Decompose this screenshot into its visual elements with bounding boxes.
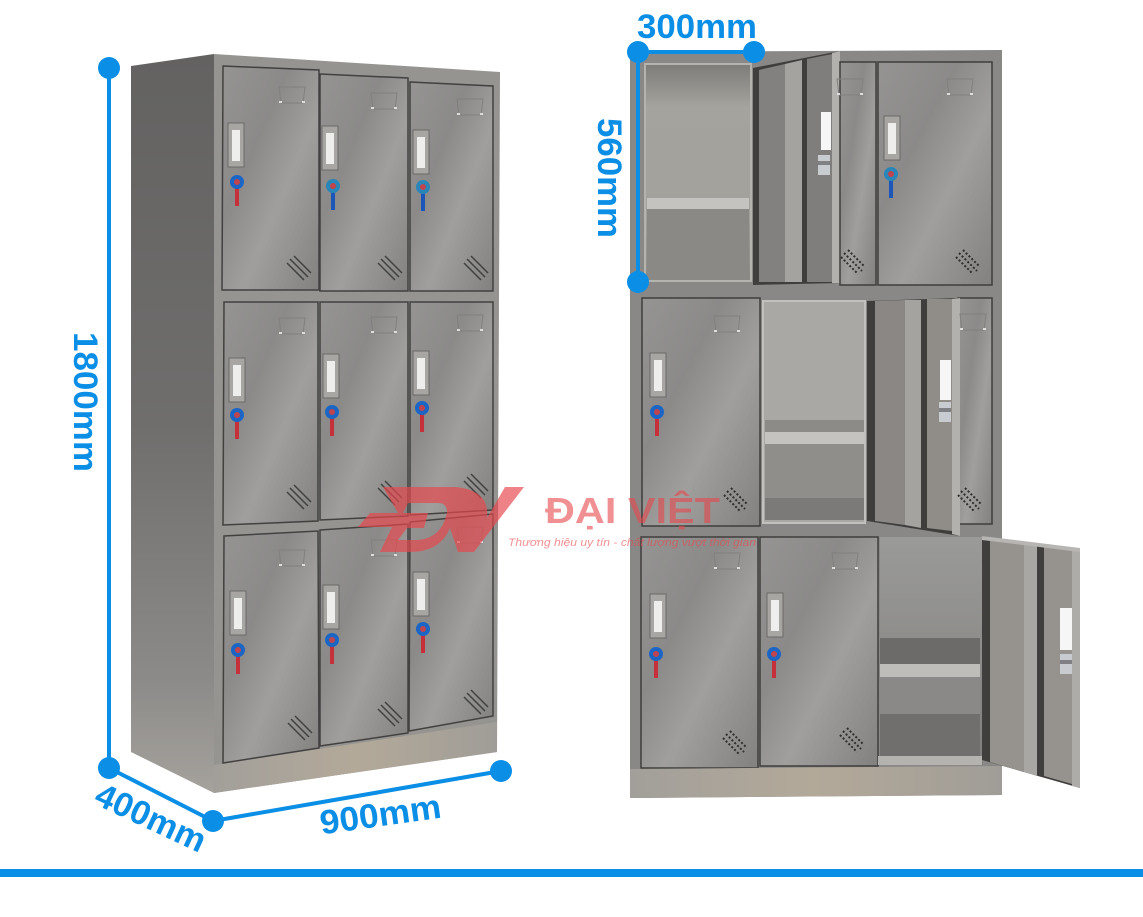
middle row doors xyxy=(223,302,493,525)
bottom row shelves xyxy=(878,638,982,765)
dimension: width 900mm xyxy=(213,760,512,842)
cabinet plinth xyxy=(630,766,1002,798)
bottom row open door xyxy=(982,536,1080,788)
locks and keys xyxy=(230,175,430,674)
dimension: width 900mm: 900mm xyxy=(317,788,444,842)
locks and keys xyxy=(649,167,898,678)
bottom row compartment open xyxy=(880,537,983,765)
watermark logo xyxy=(358,487,756,552)
cabinet front frame xyxy=(214,54,500,793)
brand name: ĐẠI VIỆT xyxy=(545,489,720,531)
dimension: height 1800mm xyxy=(66,57,120,779)
top row shelf xyxy=(647,198,749,209)
dimension: door height 560mm: 560mm xyxy=(590,118,628,238)
middle row compartment open xyxy=(763,301,865,523)
door latches xyxy=(714,79,986,569)
top row doors xyxy=(222,66,493,291)
door latches xyxy=(279,87,483,566)
dimension: depth 400mm: 400mm xyxy=(89,776,212,860)
cabinet plinth xyxy=(214,722,497,793)
top row compartment open xyxy=(645,64,751,281)
bottom row closed doors xyxy=(641,537,878,768)
middle row far door xyxy=(958,298,992,524)
dimension: height 1800mm: 1800mm xyxy=(66,332,104,472)
right cabinet xyxy=(630,50,1080,798)
cabinet side panel xyxy=(131,54,214,793)
middle row open door xyxy=(867,298,960,536)
dimension: door width 300mm: 300mm xyxy=(637,8,757,46)
dimension: door height 560mm xyxy=(590,52,649,293)
top row closed doors xyxy=(840,62,992,285)
handles xyxy=(228,123,429,635)
handles xyxy=(650,116,900,638)
dimension: door width 300mm xyxy=(627,8,765,63)
bottom divider xyxy=(0,869,1143,877)
cabinet body xyxy=(630,50,1002,798)
top row open door xyxy=(753,51,840,285)
vents xyxy=(723,250,982,755)
middle row shelves xyxy=(765,420,864,520)
left cabinet xyxy=(131,54,500,793)
logo mark xyxy=(358,487,524,552)
top row lower back xyxy=(647,209,749,279)
tagline: Thương hiệu uy tín - chất lượng vượt thời gian xyxy=(508,537,756,549)
middle row closed door xyxy=(642,298,760,526)
bottom row doors xyxy=(223,514,493,763)
vents xyxy=(287,256,488,740)
